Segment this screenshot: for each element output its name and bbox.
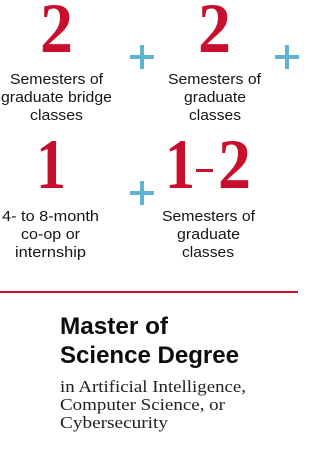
label: graduate bridge bbox=[1, 89, 112, 106]
label bbox=[2, 208, 99, 261]
step: 1 co-op or internship bbox=[2, 126, 99, 261]
number 1-2: 2 bbox=[218, 126, 251, 204]
subtitle: in Artificial Intelligence, bbox=[60, 377, 246, 396]
subtitle: Cybersecurity bbox=[60, 413, 169, 432]
step: 2 semesters of graduate bridge classes bbox=[1, 0, 112, 124]
label: co-op or bbox=[21, 226, 80, 243]
step: 2 semesters of graduate classes bbox=[168, 0, 262, 124]
icon: plus 1 bbox=[130, 45, 154, 69]
label: 4- to 8-month bbox=[2, 208, 99, 225]
subtitle: Computer Science, or bbox=[60, 395, 226, 414]
label: classes bbox=[182, 244, 234, 261]
label: Semesters of bbox=[168, 71, 262, 88]
heading: Science Degree bbox=[60, 342, 239, 369]
label bbox=[162, 208, 256, 261]
label: graduate bbox=[184, 89, 246, 106]
number 1: 1 bbox=[36, 126, 66, 204]
label: classes bbox=[189, 107, 241, 124]
number 1-2: 1 bbox=[165, 126, 195, 204]
step: 1-2 semesters of graduate classes bbox=[162, 126, 256, 261]
icon: plus 2 bbox=[275, 45, 299, 69]
number 1-2 bbox=[165, 126, 251, 204]
icon: plus 3 bbox=[130, 181, 154, 205]
label: Semesters of bbox=[162, 208, 256, 225]
label: Semesters of bbox=[10, 71, 104, 88]
label: classes bbox=[30, 107, 83, 124]
label: internship bbox=[15, 244, 86, 261]
label: graduate bbox=[177, 226, 240, 243]
label bbox=[168, 71, 262, 124]
label bbox=[1, 71, 112, 124]
heading: Master of bbox=[60, 313, 169, 340]
heading bbox=[60, 313, 239, 369]
subtitle bbox=[60, 377, 246, 432]
outcome: degree bbox=[60, 313, 246, 432]
